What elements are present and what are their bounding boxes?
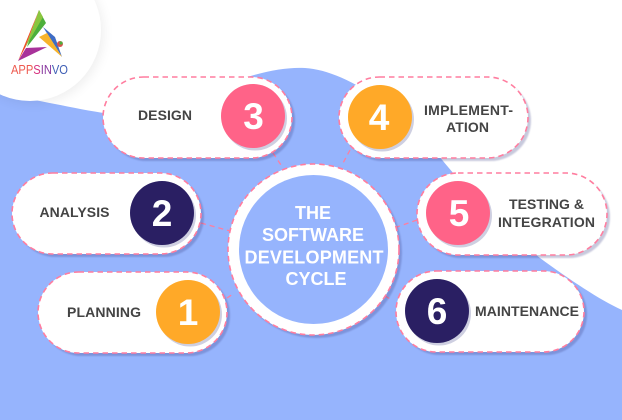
step 2: analysis xyxy=(12,173,204,257)
step 1: planning: PLANNING xyxy=(67,304,141,320)
step 2: analysis: ANALYSIS xyxy=(40,204,110,220)
step 4: implementation: ATION xyxy=(446,119,489,135)
connector lines xyxy=(201,150,417,300)
step 1: planning xyxy=(38,272,230,356)
logo badge xyxy=(0,0,103,103)
step 3: design: DESIGN xyxy=(138,107,192,123)
step 6: maintenance xyxy=(396,271,587,355)
step 1: planning: 1 xyxy=(178,292,198,333)
central title: SOFTWARE xyxy=(262,225,364,245)
step 6: maintenance: 6 xyxy=(427,291,447,332)
step 3: design: 3 xyxy=(243,96,264,137)
step 5: testing and integration xyxy=(417,173,610,258)
central title: CYCLE xyxy=(285,269,347,289)
central circle xyxy=(228,164,402,338)
step 4: implementation xyxy=(339,77,531,161)
central title xyxy=(244,203,384,289)
step 4: implementation: 4 xyxy=(369,97,390,138)
logo wordmark: APPSINVO xyxy=(11,62,68,77)
step 4: implementation: IMPLEMENT- xyxy=(424,102,513,118)
logo mark xyxy=(18,10,63,61)
step 5: testing and integration: TESTING & xyxy=(509,196,584,212)
step 2: analysis: 2 xyxy=(152,193,172,234)
step 6: maintenance: MAINTENANCE xyxy=(475,303,579,319)
central title: THE xyxy=(295,203,331,223)
central title: DEVELOPMENT xyxy=(244,248,384,268)
step 5: testing and integration: INTEGRATION xyxy=(498,214,595,230)
step 3: design xyxy=(103,77,295,161)
step 5: testing and integration: 5 xyxy=(449,193,469,234)
